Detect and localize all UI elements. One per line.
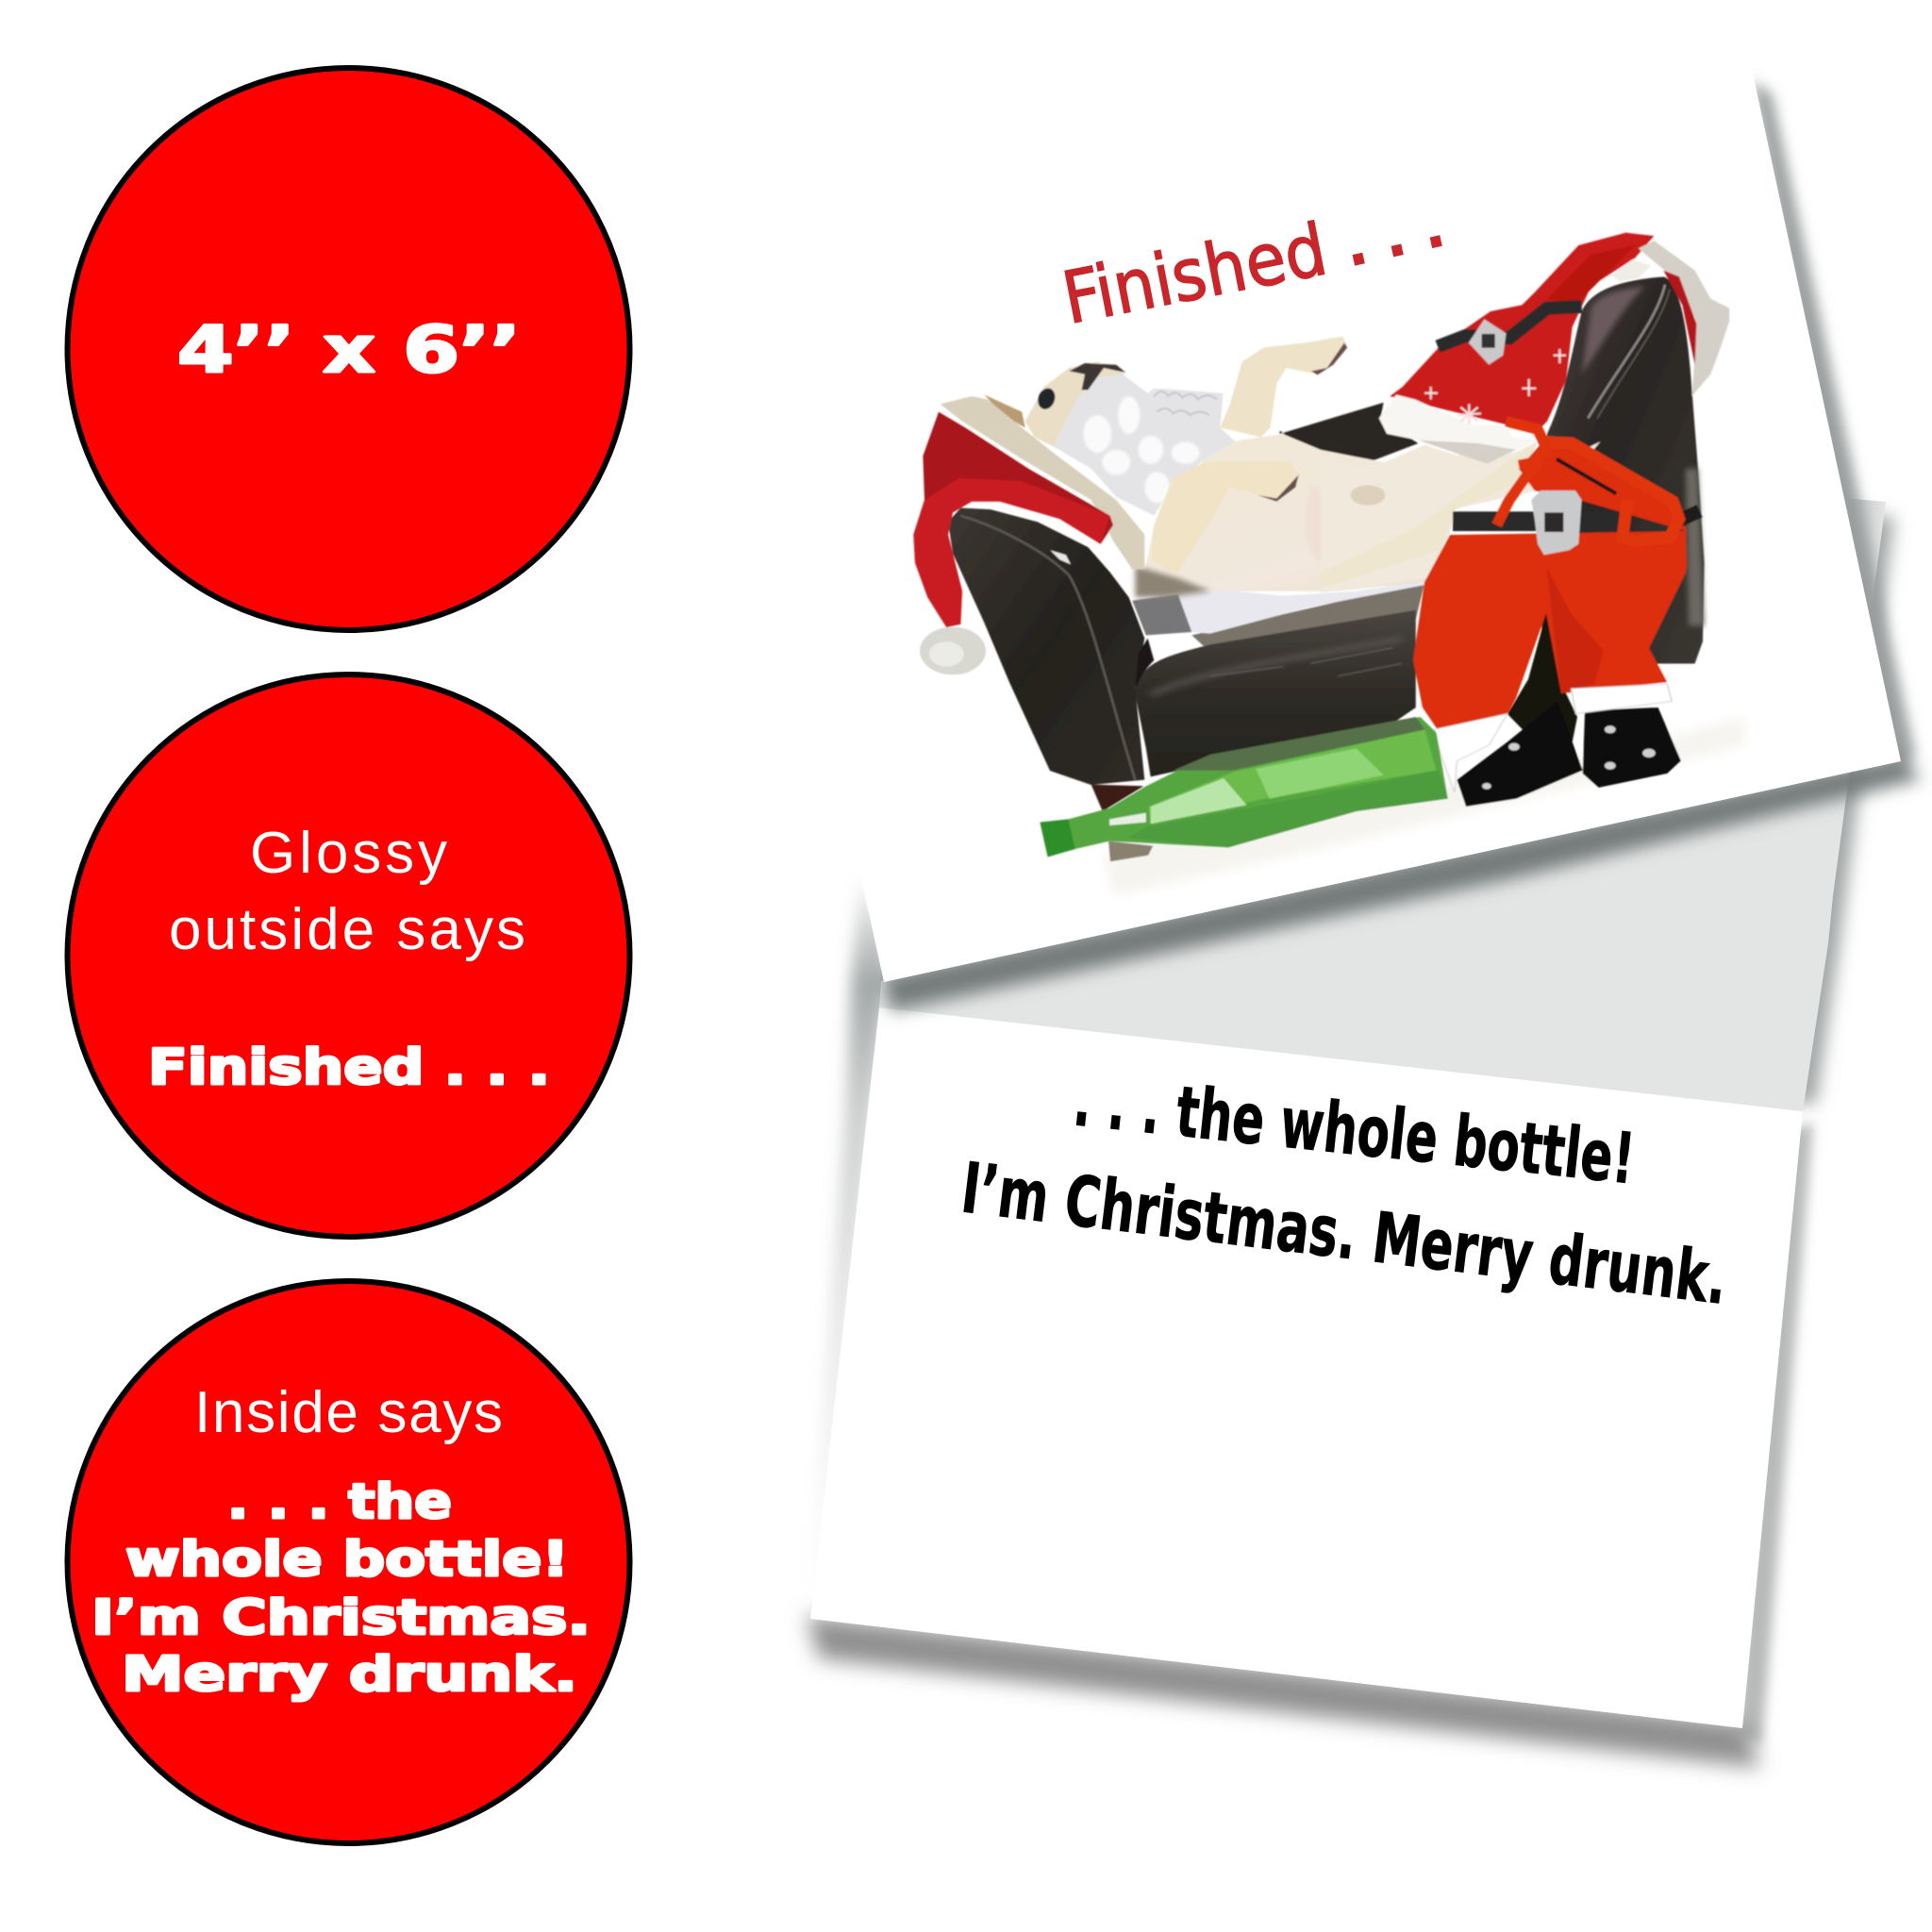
front card bbox=[733, 69, 1901, 982]
label: glossy outside says: outside says bbox=[169, 897, 525, 962]
santa jacket bbox=[1379, 233, 1729, 464]
card back panel with shadow bbox=[879, 498, 1894, 1111]
belt buckle bbox=[1531, 491, 1582, 555]
front card shadow bbox=[882, 80, 1921, 1011]
circle badge: inside message bbox=[68, 1281, 630, 1843]
straps bbox=[1497, 459, 1541, 525]
seat fleece bbox=[1132, 580, 1429, 635]
chair arm bbox=[948, 508, 1154, 785]
size text: 4’’ x 6’’ bbox=[177, 313, 521, 388]
pants back panel bbox=[1519, 437, 1687, 531]
card title: Finished bbox=[1056, 207, 1333, 341]
chair seat bbox=[1091, 580, 1429, 861]
inside card message bbox=[958, 1060, 1731, 1321]
santa hat bbox=[913, 396, 1144, 675]
inside wording: . . . the bbox=[227, 1474, 452, 1530]
gap between legs bbox=[1507, 613, 1577, 764]
dog rear leg bbox=[1321, 441, 1538, 592]
inside card message: . . . the whole bottle! bbox=[1070, 1060, 1639, 1200]
photo: dog on chair in santa suit bbox=[913, 233, 1745, 896]
inside card panel bbox=[807, 755, 1840, 1768]
label: glossy outside says bbox=[169, 821, 525, 962]
circle badge: size bbox=[68, 68, 630, 630]
green bottle bbox=[1040, 717, 1448, 857]
inside wording: I’m Christmas. bbox=[92, 1591, 591, 1646]
inside wording bbox=[92, 1474, 591, 1703]
raised paw bbox=[1220, 337, 1347, 437]
card title: . . . bbox=[1337, 192, 1451, 281]
beard bbox=[1054, 375, 1236, 516]
outside wording: Finished . . . bbox=[148, 1040, 550, 1096]
circle badge: outside message bbox=[68, 675, 630, 1237]
chair backrest bbox=[1280, 276, 1705, 663]
pants belt bbox=[1453, 492, 1629, 551]
snowflakes bbox=[1424, 349, 1566, 425]
head bbox=[1025, 361, 1125, 446]
boots and cuffs bbox=[1434, 684, 1681, 807]
inside wording: Merry drunk. bbox=[122, 1647, 577, 1703]
label: inside says: Inside says bbox=[194, 1380, 503, 1445]
inside wording: whole bottle! bbox=[125, 1532, 569, 1588]
floor reflection bbox=[1104, 717, 1745, 896]
santa pants bbox=[1413, 422, 1700, 745]
dog bbox=[984, 337, 1601, 597]
label: glossy outside says: Glossy bbox=[250, 821, 447, 886]
front paw bbox=[1151, 460, 1300, 575]
